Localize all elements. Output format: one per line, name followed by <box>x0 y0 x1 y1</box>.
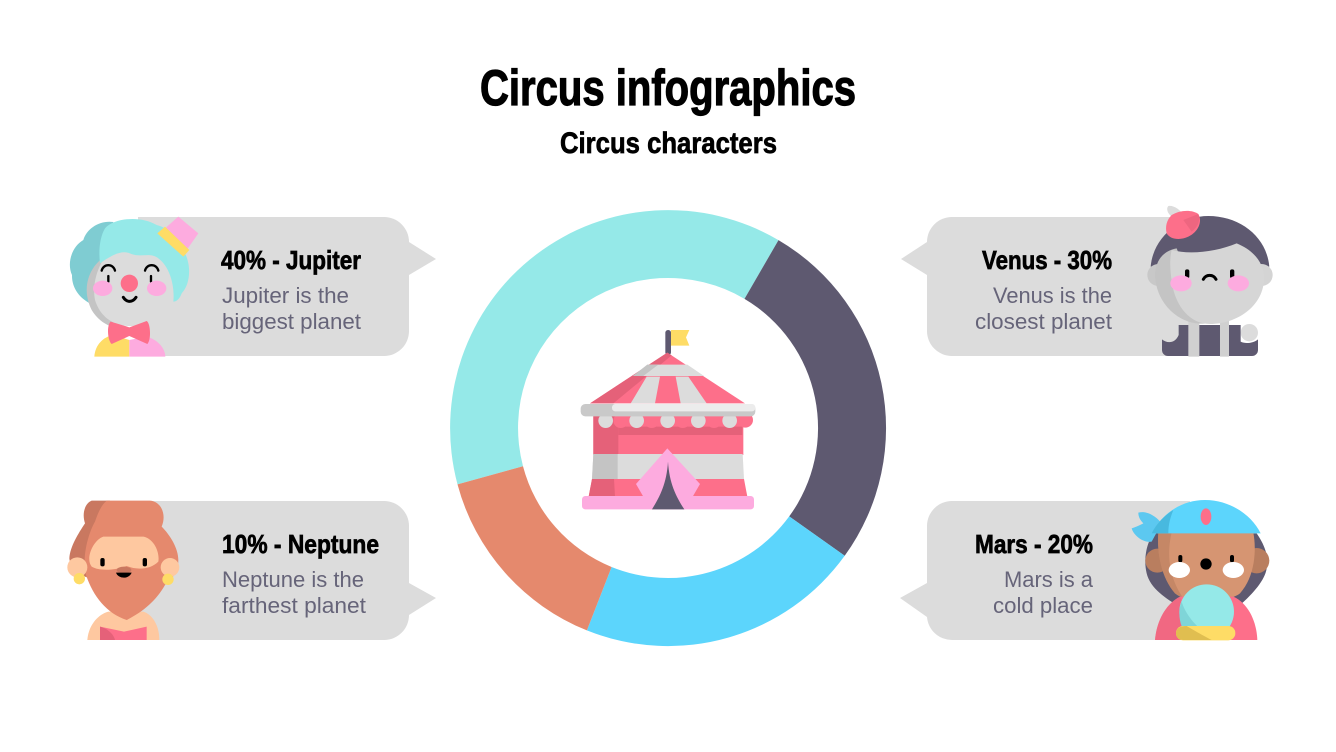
segment: Neptune 10% <box>458 466 612 630</box>
text: Neptune is the <box>222 567 364 592</box>
subtitle: Circus characters <box>560 127 777 160</box>
panel: Mars <box>900 500 1269 640</box>
icon: clown <box>70 217 198 357</box>
text: biggest planet <box>222 309 361 334</box>
icon: fortune teller <box>1132 500 1269 640</box>
text: cold place <box>993 593 1093 618</box>
text: closest planet <box>975 309 1112 334</box>
heading: 10% - Neptune <box>222 529 379 559</box>
panel: Neptune <box>67 501 436 640</box>
heading: 40% - Jupiter <box>221 245 361 275</box>
speech bubble <box>138 217 436 356</box>
text <box>975 283 1112 334</box>
segment: Venus 30% <box>744 240 886 556</box>
text <box>222 567 366 618</box>
text: Jupiter is the <box>222 283 349 308</box>
speech bubble <box>901 217 1190 356</box>
icon: mime <box>1147 206 1273 357</box>
speech bubble <box>900 501 1190 640</box>
text <box>222 283 361 334</box>
segment: Mars 20% <box>587 516 845 646</box>
heading: Mars - 20% <box>975 529 1093 559</box>
text: Venus is the <box>993 283 1112 308</box>
panel: Jupiter <box>70 217 436 357</box>
text <box>993 567 1094 618</box>
segment: Jupiter 40% <box>450 210 778 484</box>
speech bubble <box>140 501 436 640</box>
heading: Venus - 30% <box>982 245 1112 275</box>
text: Mars is a <box>1004 567 1094 592</box>
icon: circus tent <box>581 330 755 509</box>
donut chart <box>450 210 886 646</box>
icon: bearded man <box>67 501 179 640</box>
text: farthest planet <box>222 593 366 618</box>
title: Circus infographics <box>480 60 856 116</box>
panel: Venus <box>901 206 1273 357</box>
